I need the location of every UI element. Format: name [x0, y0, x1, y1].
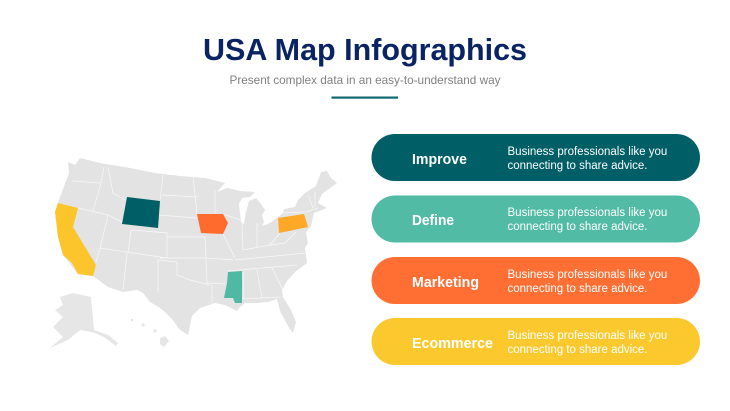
pill: Ecommerce: connecting to share advice. [508, 344, 648, 356]
pill: Ecommerce: Ecommerce [412, 336, 493, 352]
state: Mississippi [224, 271, 242, 303]
state: Pennsylvania [278, 214, 308, 233]
pill: Ecommerce: Business professionals like you [508, 330, 667, 342]
pill: Define: connecting to share advice. [508, 221, 648, 233]
subtitle: Present complex data in an easy-to-understand way [230, 73, 500, 87]
pill: Define [372, 196, 700, 242]
map: contiguous states [55, 158, 337, 335]
title underline [332, 96, 398, 99]
map: state borders [72, 167, 318, 303]
pill: Define: Define [412, 213, 454, 229]
pill: Marketing: Business professionals like you [508, 269, 667, 281]
pill: Improve: connecting to share advice. [508, 160, 648, 172]
pill: Define: Business professionals like you [508, 207, 667, 219]
state: California [55, 203, 96, 276]
pill: Marketing: Marketing [412, 275, 479, 291]
pill: Marketing [372, 257, 700, 304]
pill: Ecommerce [372, 318, 700, 365]
state: Iowa [197, 214, 228, 234]
pill: Improve: Improve [412, 152, 467, 168]
state: Wyoming [122, 197, 160, 228]
map: Alaska [50, 293, 118, 348]
USA map [50, 158, 337, 348]
pill: Improve: Business professionals like you [508, 146, 667, 158]
pill: Marketing: connecting to share advice. [508, 283, 648, 295]
map: Hawaii [131, 319, 169, 347]
pill: Improve [372, 134, 700, 181]
title: USA Map Infographics [203, 32, 527, 67]
